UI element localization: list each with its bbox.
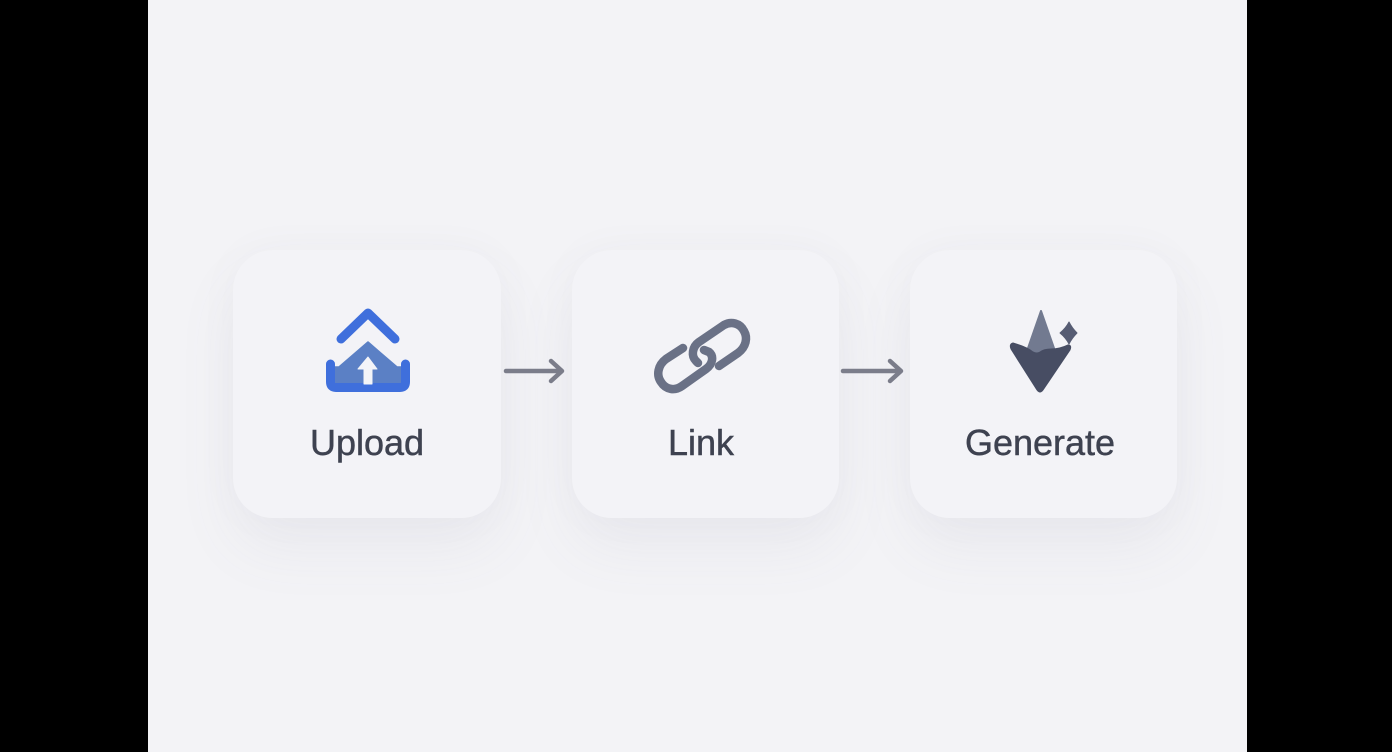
icon: link xyxy=(658,323,746,389)
icon: generate xyxy=(1010,311,1077,392)
label: Upload: Upload xyxy=(310,422,424,463)
label: Generate: Generate xyxy=(965,422,1115,463)
arrow: upload to link xyxy=(506,361,562,381)
label: Link: Link xyxy=(668,422,734,463)
background panel xyxy=(148,0,1247,752)
icon: upload xyxy=(330,313,406,388)
card: generate xyxy=(910,250,1177,518)
card: upload xyxy=(233,250,501,518)
card: link xyxy=(572,250,839,518)
arrow: link to generate xyxy=(843,361,901,381)
